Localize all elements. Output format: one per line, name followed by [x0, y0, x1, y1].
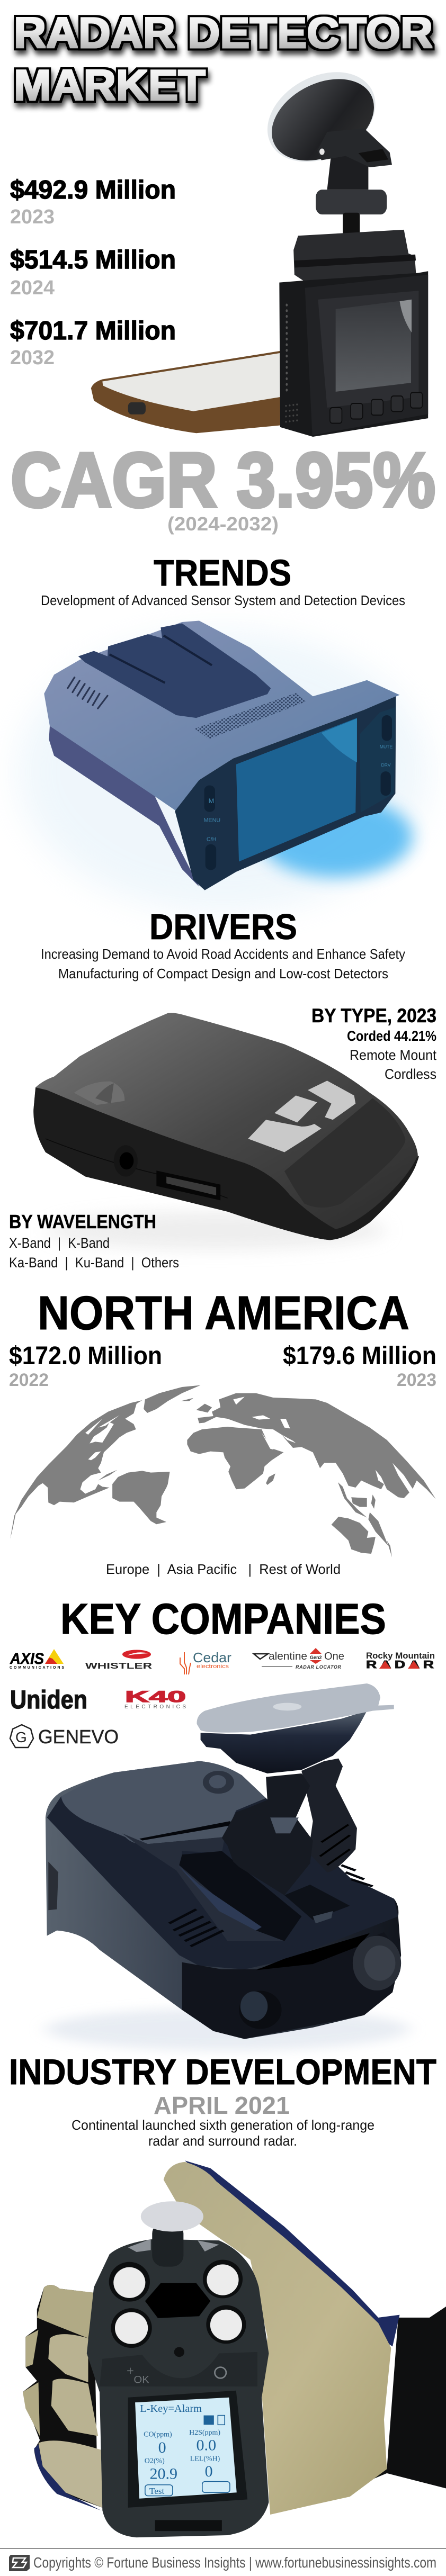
logo: valentine one: RADAR LOCATOR	[296, 1664, 341, 1670]
logo: k40: ELECTRONICS	[124, 1704, 186, 1710]
logo: axis: AXIS	[10, 1650, 44, 1668]
greenland	[144, 1385, 201, 1413]
logo: cedar: electronics	[197, 1663, 229, 1670]
device screen: CO(ppm)	[144, 2430, 172, 2439]
button labels: OK	[133, 2374, 149, 2386]
cuff	[310, 2307, 446, 2506]
development text: Continental launched sixth generation of long-range	[72, 2117, 374, 2133]
stat: north america 2023: 2023	[397, 1370, 436, 1390]
logo: uniden: Uniden	[10, 1686, 87, 1714]
stat: north america 2022	[9, 1342, 162, 1390]
stat: north america 2023: $179.6 Million	[283, 1342, 436, 1370]
by type: BY TYPE, 2023	[311, 1005, 436, 1026]
iceland	[181, 1398, 193, 1401]
stat: 2032 market size	[10, 317, 176, 369]
device front: MUTE	[380, 744, 393, 749]
by type	[311, 1005, 436, 1082]
madagascar	[266, 1473, 275, 1485]
by wavelength	[9, 1211, 179, 1271]
logo: cedar	[180, 1650, 231, 1674]
logo: whistler: WHISTLER	[85, 1662, 153, 1671]
by type: Cordless	[385, 1066, 436, 1082]
image: black radar detector	[33, 1013, 419, 1249]
device body	[87, 2201, 269, 2537]
logo: genevo: GENEVO	[38, 1726, 119, 1748]
image: dash camera on phone	[91, 57, 428, 437]
audio jack	[114, 1145, 138, 1176]
australia	[332, 1517, 376, 1554]
device screen: LEL(%H)	[190, 2455, 220, 2463]
logo: valentine one: alentine	[269, 1651, 307, 1662]
drivers text: Manufacturing of Compact Design and Low-cost Detectors	[58, 966, 388, 981]
CAGR: (2024-2032)	[167, 513, 279, 535]
caribbean islands	[98, 1470, 117, 1481]
date: APRIL 2021	[154, 2092, 290, 2119]
device body	[44, 620, 399, 887]
device front: M	[209, 797, 214, 805]
silver buttons	[248, 1080, 355, 1152]
heading: north america: NORTH AMERICA	[38, 1287, 409, 1340]
footer logo	[9, 2555, 30, 2571]
device screen: L-Key=Alarm	[140, 2403, 202, 2415]
device front	[175, 696, 396, 890]
by type: Remote Mount	[350, 1047, 436, 1063]
logo: whistler	[85, 1650, 153, 1671]
stat: 2023 market size: $492.9 Million	[10, 176, 176, 204]
device screen: 0	[205, 2464, 213, 2480]
north america landmass	[10, 1400, 142, 1539]
eurasia	[198, 1393, 436, 1499]
logo: valentine one	[254, 1648, 344, 1670]
drivers text	[41, 946, 405, 981]
stat: 2032 market size: 2032	[10, 347, 55, 369]
trends text: Development of Advanced Sensor System and Detection Devices	[41, 592, 405, 608]
logo: rocky mountain radar: Rocky Mountain	[366, 1651, 435, 1661]
stat: north america 2022: 2022	[9, 1370, 49, 1390]
development text	[72, 2117, 374, 2149]
device front: MENU	[203, 818, 220, 823]
logo: valentine one: Gen2	[310, 1655, 322, 1660]
logo: rocky mountain radar: R A D A R	[366, 1659, 434, 1671]
image: gas detector in gloved hand	[23, 2160, 446, 2537]
device front: C/H	[207, 836, 216, 842]
logo: k40: K40	[125, 1688, 186, 1706]
suction cup	[258, 57, 384, 177]
stat: 2024 market size	[10, 246, 176, 299]
logo: rocky mountain radar	[366, 1651, 435, 1671]
south america	[112, 1471, 170, 1524]
title: MARKET	[14, 61, 206, 110]
logo: k40	[124, 1688, 186, 1710]
africa	[187, 1427, 283, 1489]
device screen: 0	[158, 2439, 166, 2456]
volume wheel	[156, 1170, 220, 1200]
detector body	[46, 1761, 401, 2039]
footer	[0, 2548, 446, 2571]
detector body	[33, 1013, 419, 1240]
drivers text: Increasing Demand to Avoid Road Accidents and Enhance Safety	[41, 946, 405, 962]
button labels: +	[127, 2364, 134, 2377]
logo: axis	[10, 1649, 64, 1670]
device screen: 20.9	[149, 2466, 177, 2482]
united kingdom	[197, 1404, 212, 1412]
indonesia and pacific islands	[338, 1482, 367, 1518]
device screen	[135, 2398, 237, 2499]
logo: genevo: G	[15, 1729, 27, 1745]
by wavelength: Ka-Band | Ku-Band | Others	[9, 1255, 179, 1271]
stat: 2024 market size: $514.5 Million	[10, 246, 176, 274]
heading: key companies: KEY COMPANIES	[60, 1595, 386, 1643]
device screen: H2S(ppm)	[189, 2428, 220, 2437]
device screen: 0.0	[197, 2437, 216, 2454]
by wavelength: X-Band | K-Band	[9, 1235, 110, 1251]
world map	[10, 1385, 436, 1557]
stat: 2023 market size	[10, 176, 176, 228]
image: blue radar detector	[18, 620, 428, 912]
title: RADAR DETECTOR	[14, 9, 433, 57]
background glow	[18, 632, 428, 912]
title	[14, 9, 433, 110]
camera body	[279, 230, 428, 437]
device front: DRV	[381, 762, 391, 768]
logo: valentine one: One	[324, 1651, 344, 1662]
stat: north america 2023	[283, 1342, 436, 1390]
by wavelength: BY WAVELENGTH	[9, 1211, 156, 1232]
button labels	[127, 2364, 226, 2386]
phone	[91, 351, 280, 433]
mount arm	[316, 128, 392, 238]
heading: trends: TRENDS	[154, 552, 291, 593]
sensor ports	[109, 2260, 246, 2348]
device screen: Test	[149, 2486, 165, 2496]
device screen: O2(%)	[145, 2457, 165, 2465]
image: radar detector with suction mount	[46, 1683, 409, 2050]
mount arm	[222, 1759, 357, 1923]
suction cup	[197, 1683, 394, 1773]
stat: 2032 market size: $701.7 Million	[10, 317, 176, 345]
logo: cedar: Cedar	[193, 1650, 231, 1665]
stat: 2023 market size: 2023	[10, 206, 55, 228]
stat: 2024 market size: 2024	[10, 277, 55, 299]
glove	[23, 2160, 399, 2515]
development text: radar and surround radar.	[148, 2133, 297, 2149]
regions list: Europe | Asia Pacific | Rest of World	[106, 1561, 341, 1577]
logo: axis: COMMUNICATIONS	[10, 1666, 64, 1670]
heading: drivers: DRIVERS	[149, 907, 297, 947]
stat: north america 2022: $172.0 Million	[9, 1342, 162, 1370]
